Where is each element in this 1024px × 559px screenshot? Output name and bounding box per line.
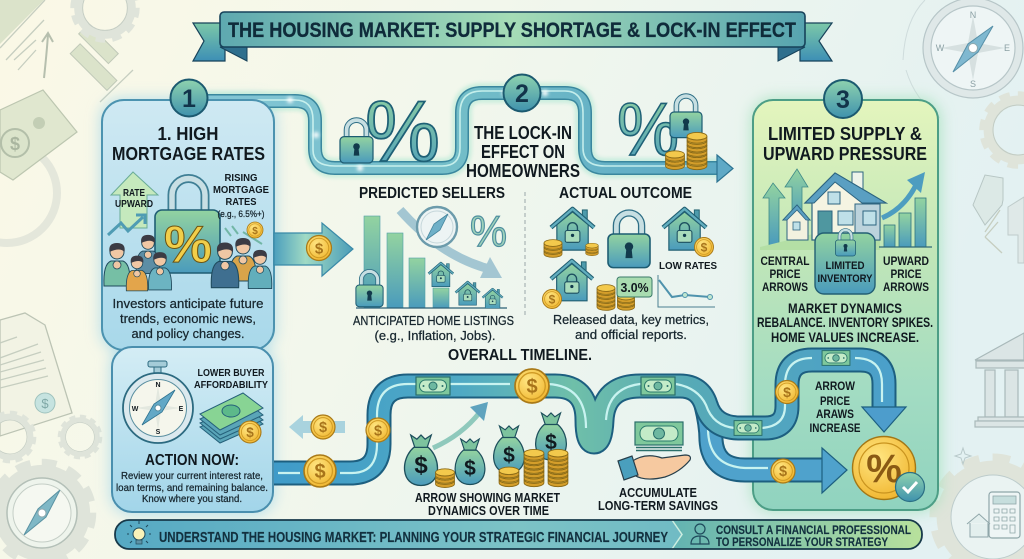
panel: action now: [112, 347, 273, 512]
arrow: panel 1 to predicted sellers: $: [315, 240, 324, 258]
chart: upward bars and arrow: [879, 172, 932, 247]
badge 3: [824, 80, 862, 118]
timeline: coins on pipe: [304, 369, 798, 487]
timeline: banknotes on pipe: [416, 351, 850, 435]
chart: predicted sellers bars: [356, 210, 507, 308]
badge 2: [504, 74, 540, 112]
panel 1 heading: 1. HIGH: [158, 123, 218, 144]
timeline: coins on pipe: $: [526, 376, 538, 398]
heading: predicted sellers: PREDICTED SELLERS: [359, 185, 505, 202]
illustration: worried people right: [211, 238, 272, 289]
panel 3 description: REBALANCE. INVENTORY SPIKES.: [757, 314, 933, 330]
icon: stopwatch compass: S: [156, 429, 161, 436]
caption: arrow showing market dynamics: [415, 491, 560, 518]
caption: released data: Released data, key metrics,: [553, 312, 709, 327]
background illustrations: right paper: [973, 175, 1024, 263]
icon: stopwatch compass: [123, 361, 193, 443]
caption: anticipated home listings: (e.g., Inflation, Jobs).: [374, 328, 496, 343]
action now description: Know where you stand.: [142, 493, 242, 505]
icon: light bulb: [127, 521, 151, 544]
panel 3 description: [757, 300, 933, 345]
arrow: faded left arrow with coin: $: [319, 420, 327, 436]
illustration: houses: [760, 172, 886, 250]
box: limited inventory: LIMITED: [826, 260, 865, 272]
icon: percent coin with check: %: [866, 447, 902, 491]
footer banner: [115, 520, 922, 549]
icon: percent coin with check: [852, 436, 924, 502]
background illustrations: top right compass: [903, 0, 1023, 118]
timeline: coins on pipe: $: [314, 461, 326, 483]
icon group: locked houses: $: [549, 292, 556, 306]
label: arrow price increase: ARROW: [815, 379, 856, 393]
icon: compass magnifier: [417, 207, 457, 247]
background illustrations: bank: [975, 333, 1024, 427]
icon: big percent lock: %: [164, 216, 212, 274]
icon: hand holding cash: [618, 422, 690, 480]
icon: coin stacks and rate tag: [597, 277, 652, 310]
timeline: coins on pipe: $: [374, 424, 382, 440]
icon: stopwatch compass: E: [179, 406, 184, 413]
panel 3 description: HOME VALUES INCREASE.: [771, 329, 919, 345]
arrow: faded left arrow with coin: [289, 415, 345, 439]
illustration: money bags and rising arrow: $: [414, 452, 428, 479]
icon: rate upward arrow: RATE: [123, 188, 145, 199]
timeline: branch arrow to percent coin: [706, 405, 847, 493]
panel 3 heading: [763, 123, 927, 164]
timeline: main pipe: [272, 358, 906, 473]
heading: overall timeline: OVERALL TIMELINE.: [448, 347, 592, 364]
icon: coin stacks and rate tag: 3.0%: [620, 280, 649, 295]
label: rising mortgage rates: RATES: [226, 196, 256, 208]
panel 3 heading: LIMITED SUPPLY &: [768, 123, 922, 144]
badge 2: 2: [515, 80, 529, 108]
icon: falling coin: [225, 222, 263, 244]
panel 1: high mortgage rates: [102, 80, 274, 350]
arrow: panel 1 to predicted sellers: [274, 223, 353, 276]
background illustrations: top right compass: S: [970, 79, 976, 89]
footer right text: TO PERSONALIZE YOUR STRATEGY: [716, 535, 888, 549]
icon: percent, lock and coins on top pipe right: %: [617, 87, 679, 171]
timeline: coins on pipe: $: [779, 464, 787, 480]
label: rising mortgage rates: RISING: [224, 172, 258, 184]
caption: arrow showing market dynamics: ARROW SHOWING MARKET: [415, 491, 560, 505]
icon: small percent: %: [470, 207, 507, 256]
caption: accumulate long-term savings: ACCUMULATE: [619, 486, 697, 500]
icon: stopwatch compass: W: [132, 406, 139, 413]
icon: stopwatch compass: N: [155, 382, 161, 389]
caption: anticipated home listings: [353, 314, 514, 343]
label: arrow price increase: ARAWS: [816, 407, 854, 421]
background illustrations: right gear: [984, 96, 1024, 164]
illustration: money bags and rising arrow: $: [503, 444, 515, 467]
panel 1 heading: [112, 123, 265, 164]
icon: central lock: [608, 213, 650, 268]
label: upward price arrows: UPWARD: [883, 256, 929, 268]
footer right text: CONSULT A FINANCIAL PROFESSIONAL: [716, 523, 911, 537]
icon: stack of cash: $: [246, 425, 254, 440]
panel 3: limited supply: [753, 80, 938, 510]
action now heading: ACTION NOW:: [145, 452, 239, 469]
footer left text: UNDERSTAND THE HOUSING MARKET: PLANNING YOUR STRATEGIC FINANCIAL JOURNEY: [159, 530, 668, 546]
label: arrow price increase: PRICE: [820, 394, 850, 408]
panel 1 description: and policy changes.: [132, 326, 244, 341]
label: lower buyer affordability: AFFORDABILITY: [194, 379, 268, 391]
badge 1: 1: [182, 85, 196, 113]
caption: arrow showing market dynamics: DYNAMICS OVER TIME: [428, 504, 549, 518]
icon: financial professional: [691, 524, 709, 544]
icon: falling coin: $: [252, 226, 258, 237]
background illustrations: top right compass: E: [1004, 43, 1010, 53]
background illustrations: top left chart: [0, 0, 135, 102]
badge 1: [170, 80, 208, 116]
label: central price arrows: ARROWS: [762, 282, 808, 294]
icon group: locked houses: $: [701, 240, 708, 254]
heading: lock-in effect: HOMEOWNERS: [466, 161, 580, 181]
background illustrations: top right compass: W: [936, 43, 945, 53]
label: upward price arrows: [883, 256, 929, 294]
footer right text: [716, 523, 911, 549]
background illustrations: document: [0, 313, 72, 436]
box: limited inventory: INVENTORY: [818, 273, 873, 285]
label: upward price arrows: PRICE: [890, 269, 922, 281]
action now description: Review your current interest rate,: [121, 470, 263, 482]
background illustrations: dollar bill and clock: $: [10, 134, 20, 154]
action now description: loan terms, and remaining balance.: [116, 482, 268, 494]
label: arrow price increase: INCREASE: [810, 421, 860, 435]
background illustrations: gears and compass at lower left: [0, 414, 99, 559]
panel 1 description: trends, economic news,: [120, 311, 256, 326]
panel glows: [100, 98, 941, 515]
illustration: worried people left: [104, 235, 172, 291]
background illustrations: top right compass: N: [970, 10, 976, 20]
title banner: [193, 12, 832, 61]
panel 1 description: [112, 296, 264, 341]
timeline: coins on pipe: $: [783, 384, 791, 400]
label: rising mortgage rates: (e.g., 6.5%+): [218, 209, 264, 219]
label: rising mortgage rates: MORTGAGE: [213, 184, 269, 196]
icon: big percent lock: [155, 178, 220, 274]
label: upward price arrows: ARROWS: [883, 282, 929, 294]
label: rising mortgage rates: [213, 172, 269, 219]
caption: accumulate long-term savings: LONG-TERM SAVINGS: [598, 499, 718, 513]
heading: actual outcome: ACTUAL OUTCOME: [559, 185, 692, 202]
panel 1 description: Investors anticipate future: [112, 296, 264, 311]
heading: lock-in effect: [466, 123, 580, 181]
heading: lock-in effect: THE LOCK-IN: [474, 123, 572, 143]
label: central price arrows: PRICE: [770, 269, 801, 281]
illustration: money bags and rising arrow: $: [545, 431, 557, 454]
background illustrations: dollar bill and clock: [0, 90, 77, 243]
panel 3 heading: UPWARD PRESSURE: [763, 143, 927, 164]
box: limited inventory: [815, 230, 875, 294]
caption: anticipated home listings: ANTICIPATED HOME LISTINGS: [353, 314, 514, 328]
badge 3: 3: [836, 86, 850, 114]
caption: accumulate long-term savings: [598, 486, 718, 513]
icon: rate upward arrow: [108, 172, 158, 235]
label: low rates: LOW RATES: [659, 260, 717, 272]
illustration: money bags and rising arrow: [405, 402, 568, 488]
background illustrations: document: $: [41, 396, 49, 411]
label: central price arrows: CENTRAL: [760, 256, 810, 268]
title banner: THE HOUSING MARKET: SUPPLY SHORTAGE & LOCK-IN EFFECT: [228, 19, 796, 42]
action now description: [116, 470, 268, 505]
icon group: locked houses: [542, 209, 714, 308]
label: lower buyer affordability: [194, 367, 268, 391]
icon: rising arrows: [763, 169, 808, 245]
icon: rate upward arrow: UPWARD: [115, 199, 153, 210]
heading: lock-in effect: EFFECT ON: [481, 142, 565, 162]
sparkles on top pipe: [287, 90, 548, 171]
icon: stack of cash: [200, 393, 263, 443]
caption: released data: and official reports.: [575, 327, 687, 342]
panel 3 description: MARKET DYNAMICS: [788, 300, 902, 316]
panel 1 heading: MORTGAGE RATES: [112, 143, 265, 164]
background illustrations: gear and calculator: [938, 448, 1024, 559]
label: arrow price increase: [810, 379, 860, 435]
chart: low rates line: [658, 275, 715, 307]
connector: top pipe: [207, 91, 733, 182]
caption: released data: [553, 312, 709, 342]
label: lower buyer affordability: LOWER BUYER: [198, 367, 265, 379]
icon: percent and lock on top pipe left: %: [365, 84, 440, 180]
label: central price arrows: [760, 256, 810, 294]
illustration: money bags and rising arrow: $: [464, 457, 476, 480]
